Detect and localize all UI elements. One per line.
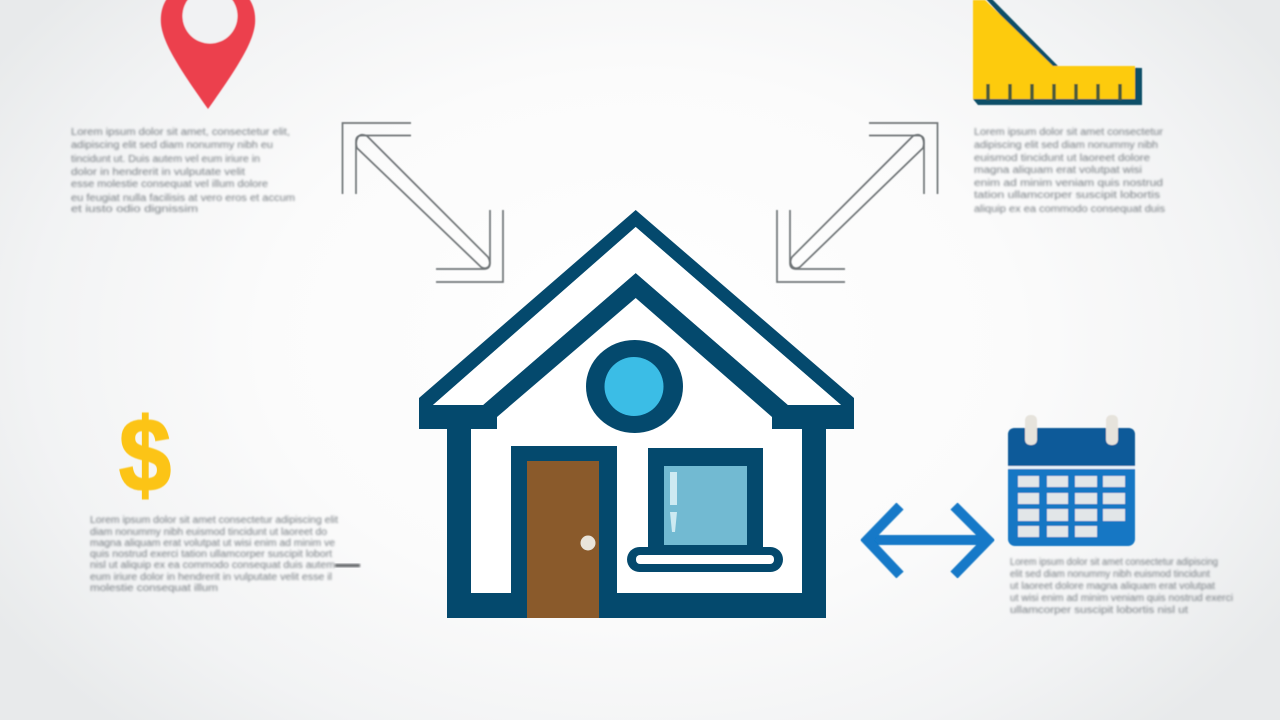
house wall fill [471,290,802,600]
text block: schedule: elit sed diam nonummy nibh euismod tincidunt [1010,569,1210,580]
window [627,448,783,572]
text block: size [974,127,1165,215]
icon: ruler [973,0,1142,105]
text block: size: adipiscing elit sed diam nonummy nibh [974,140,1158,151]
text block: price: molestie consequat illum [90,583,218,594]
house walls [447,429,826,618]
door [511,446,617,618]
text block: location: esse molestie consequat vel illum dolore [71,179,268,190]
text block: size: euismod tincidunt ut laoreet dolore [974,153,1151,164]
text block: schedule: ut wisi enim ad minim veniam quis nostrud exerci [1010,593,1233,604]
text block: price [90,515,338,594]
text block: price: magna aliquam erat volutpat ut wisi enim ad minim ve [90,538,335,549]
icon: house [419,210,854,618]
text block: location: et iusto odio dignissim [71,204,198,215]
text block: size: tation ullamcorper suscipit lobortis [974,190,1160,201]
icon: calendar [1008,415,1135,546]
text block: location: tincidunt ut. Duis autem vel eum iriure in [71,154,260,165]
text block: size: magna aliquam erat volutpat wisi [974,165,1142,176]
text block: price: nisl ut aliquip ex ea commodo consequat duis autem [90,560,335,571]
arrow: double headed [867,506,988,575]
text block: location: Lorem ipsum dolor sit amet, consectetur elit, [71,127,290,138]
text block: schedule: Lorem ipsum dolor sit amet consectetur adipiscing [1010,557,1218,568]
text block: location [71,127,295,215]
house roof [419,210,854,429]
text block: size: enim ad minim veniam quis nostrud [974,178,1163,189]
icon: location pin [161,0,255,109]
text block: size: Lorem ipsum dolor sit amet consectetur [974,127,1164,138]
text block: price: diam nonummy nibh euismod tincidunt ut laoreet do [90,527,327,538]
round attic window [586,340,683,433]
text block: schedule: ut laoreet dolore magna aliquam erat volutpat [1010,581,1215,592]
text accent: dark word [335,564,360,567]
text block: schedule: ullamcorper suscipit lobortis nisl ut [1010,605,1188,616]
arrow: top left diagonal [342,123,503,282]
text block: location: eu feugiat nulla facilisis at vero eros et accum [71,193,295,204]
text block: price: quis nostrud exerci tation ullamcorper suscipit lobort [90,549,332,560]
text block: price: Lorem ipsum dolor sit amet consectetur adipiscing elit [90,515,338,526]
arrow: top right diagonal [777,123,938,282]
text block: size: aliquip ex ea commodo consequat duis [974,204,1165,215]
text block: location: adipiscing elit sed diam nonummy nibh eu [71,140,273,151]
icon: dollar sign: $ [119,396,171,513]
text block: location: dolor in hendrerit in vulputate velit [71,167,245,178]
text block: price: eum iriure dolor in hendrerit in vulputate velit esse il [90,572,332,583]
text block: schedule [1010,557,1233,616]
